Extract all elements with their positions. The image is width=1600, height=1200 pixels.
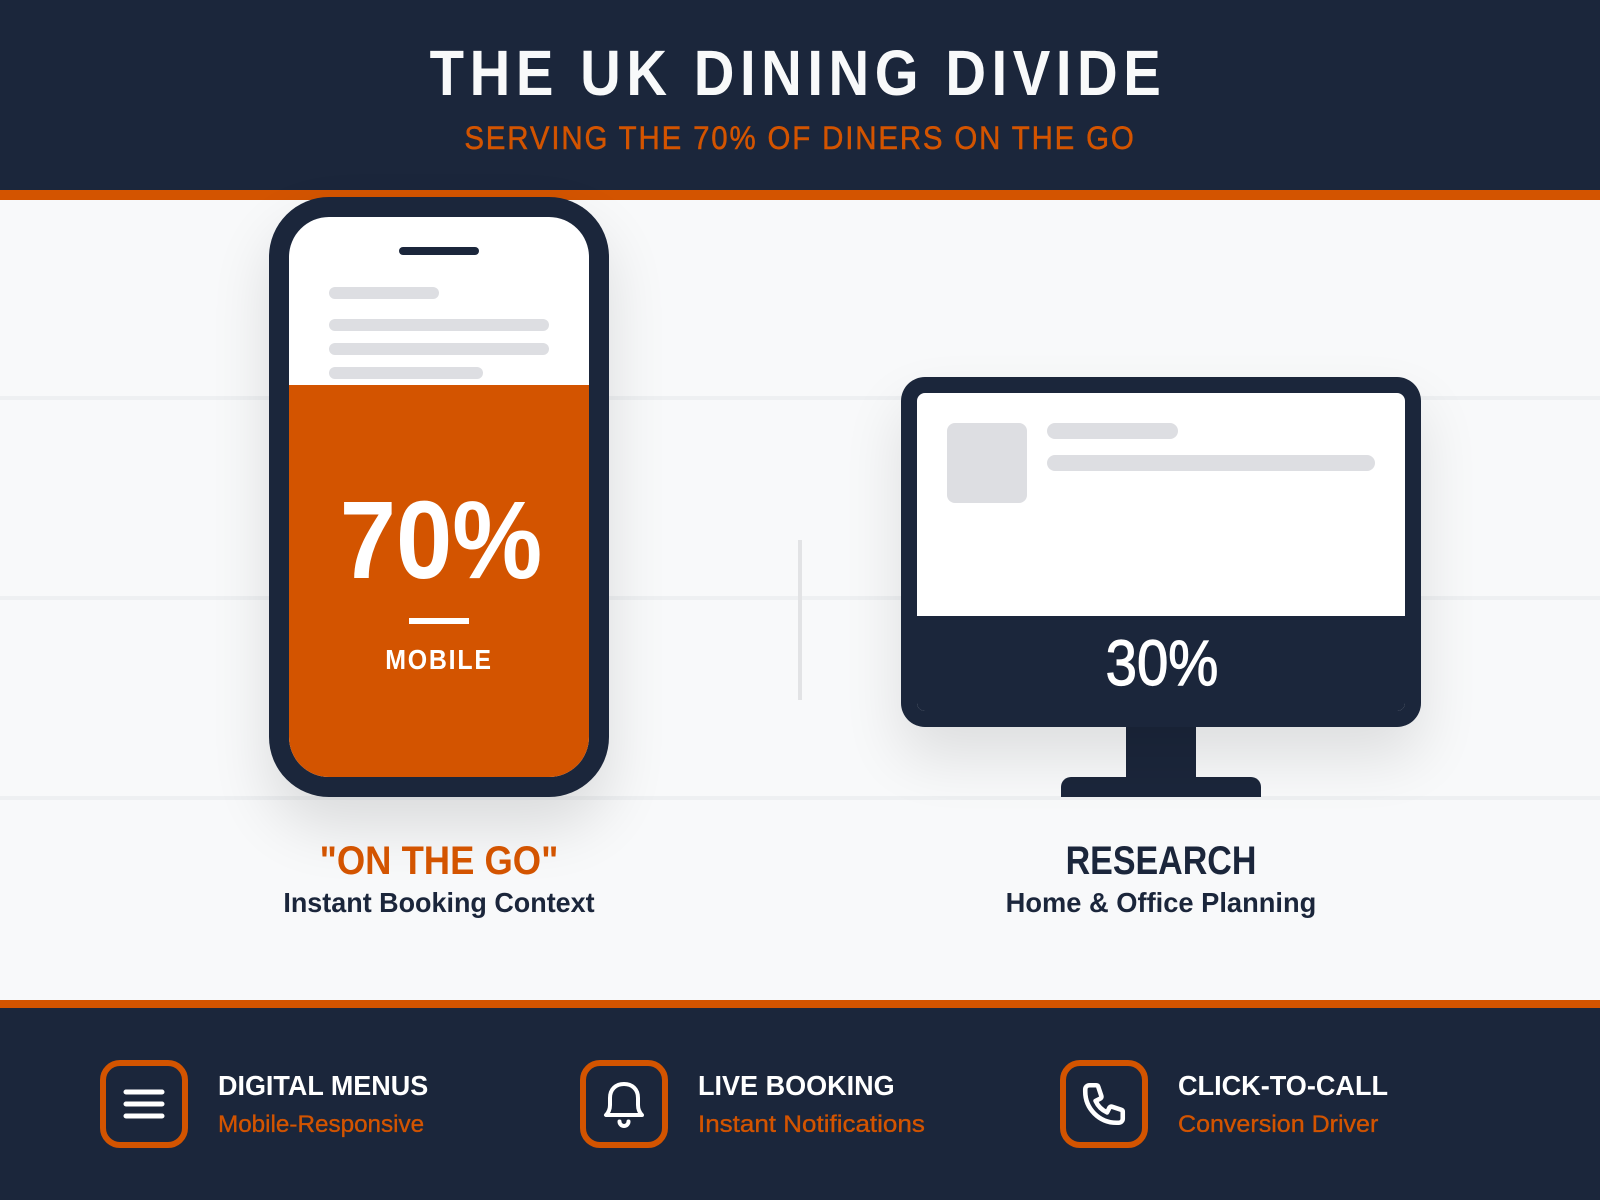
phone notch [399, 247, 479, 255]
monitor body [901, 377, 1421, 727]
feature title: LIVE BOOKING [698, 1070, 895, 1101]
caption heading: "ON THE GO" [320, 839, 558, 883]
caption subtext: Instant Booking Context [283, 887, 595, 918]
30% value: 30% [1106, 627, 1218, 699]
icon: phone handset [1060, 1060, 1148, 1148]
monitor stand neck [1126, 727, 1196, 777]
header band [0, 0, 1600, 200]
subtitle: SERVING THE 70% OF DINERS ON THE GO [464, 120, 1136, 156]
caption: research [1006, 839, 1316, 918]
thumbnail placeholder [947, 423, 1027, 503]
long text placeholder [1047, 455, 1375, 471]
icon: bell [580, 1060, 668, 1148]
desktop share fill [917, 616, 1405, 711]
caption heading: RESEARCH [1066, 839, 1256, 883]
feature title: DIGITAL MENUS [218, 1070, 428, 1101]
desktop monitor [887, 377, 1435, 797]
icon: menu [100, 1060, 188, 1148]
footer band [0, 1000, 1600, 1200]
caption: on the go [283, 839, 595, 918]
feature subtitle: Conversion Driver [1178, 1111, 1378, 1138]
phone device [269, 197, 609, 797]
feature subtitle: Instant Notifications [698, 1111, 925, 1138]
feature title: CLICK-TO-CALL [1178, 1070, 1388, 1101]
short text placeholder [1047, 423, 1178, 439]
monitor screen [917, 393, 1405, 711]
mobile share fill [289, 385, 589, 777]
feature: live booking [580, 1060, 925, 1148]
feature subtitle: Mobile-Responsive [218, 1111, 424, 1138]
centre divider [798, 540, 802, 700]
caption subtext: Home & Office Planning [1006, 887, 1316, 918]
70% value: 70% [340, 479, 542, 602]
monitor stand base [1061, 777, 1261, 797]
phone screen [289, 217, 589, 777]
value rule [409, 618, 469, 624]
feature: click-to-call [1060, 1060, 1388, 1148]
mobile label: MOBILE [385, 644, 493, 675]
feature: digital menus [100, 1060, 428, 1148]
phone placeholder lines [329, 287, 549, 379]
title: THE UK DINING DIVIDE [430, 37, 1166, 109]
